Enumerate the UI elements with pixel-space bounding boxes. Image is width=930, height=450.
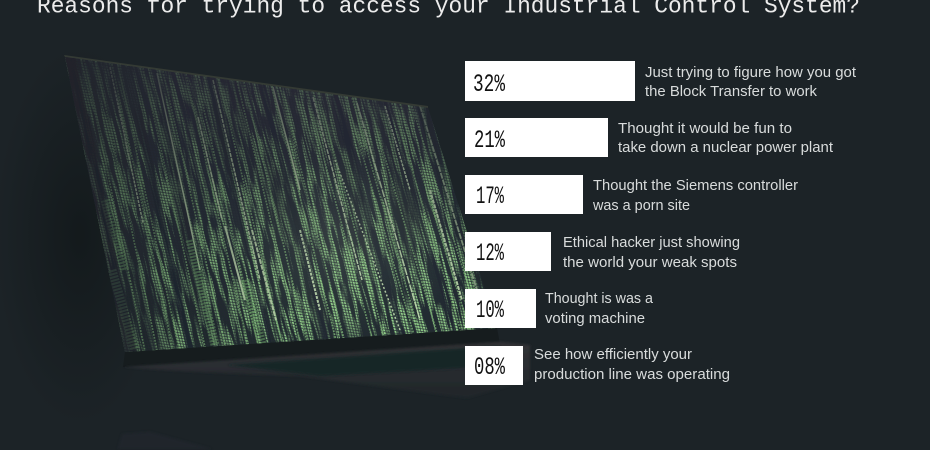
laptop screen with code rain [65, 58, 496, 352]
label: 10% reason [545, 291, 654, 327]
bar: 10%: 10% [476, 296, 505, 325]
label: 17% reason: Thought the Siemens controller [593, 178, 798, 194]
label: 32% reason [645, 65, 856, 100]
label: 21% reason: take down a nuclear power plant [618, 140, 833, 156]
keyboard reflection [227, 346, 500, 376]
table reflection [118, 432, 212, 449]
laptop photo [57, 55, 530, 382]
bar: 17%: 17% [476, 182, 505, 211]
label: 12% reason: Ethical hacker just showing [563, 235, 740, 251]
bar: 21%: 21% [474, 126, 506, 155]
label: 08% reason: See how efficiently your [534, 347, 692, 363]
bar: 08% [465, 346, 523, 385]
label: 21% reason: Thought it would be fun to [618, 121, 792, 137]
bar: 32%: 32% [473, 70, 506, 99]
label: 08% reason: production line was operating [534, 367, 730, 383]
label: 21% reason [618, 121, 833, 156]
bar: 21% [465, 118, 608, 157]
label: 12% reason [563, 235, 740, 271]
bar: 17% [465, 175, 583, 214]
label: 08% reason [534, 347, 730, 383]
label: 32% reason: Just trying to figure how you got [645, 65, 856, 81]
label: 12% reason: the world your weak spots [563, 255, 737, 271]
laptop shadow [0, 45, 165, 425]
bar: 12%: 12% [476, 239, 505, 268]
label: 10% reason: voting machine [545, 311, 645, 327]
laptop lid top edge [64, 55, 428, 108]
bar: 10% [465, 289, 536, 328]
label: 17% reason [592, 178, 798, 214]
label: 32% reason: the Block Transfer to work [645, 84, 818, 100]
bar: 32% [465, 61, 635, 101]
laptop keyboard deck [123, 342, 530, 398]
bar: 08%: 08% [474, 353, 506, 382]
bar chart: reasons [465, 61, 856, 385]
label: 17% reason: was a porn site [592, 198, 690, 214]
bar: 12% [465, 232, 551, 271]
label: 10% reason: Thought is was a [545, 291, 654, 307]
laptop bezel [123, 328, 500, 367]
